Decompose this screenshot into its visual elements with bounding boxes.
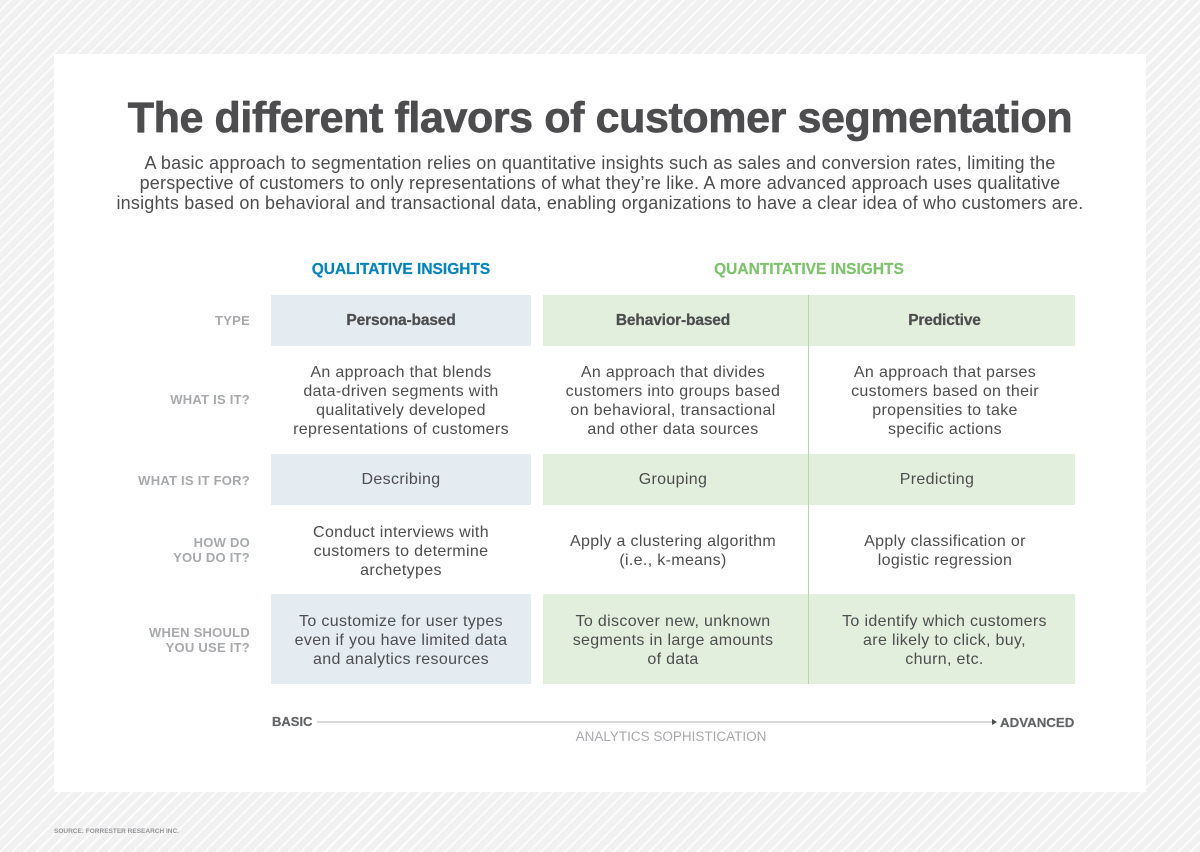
cell: behavior-based use: of data: [647, 651, 699, 668]
intro text: [116, 152, 1084, 213]
cell: behavior-based description: customers into groups based: [566, 383, 780, 400]
intro text: perspective of customers to only representations of what they’re like. A more advanced approach uses qualitative: [140, 172, 1060, 192]
cell: behavior-based method: Apply a clustering algorithm: [570, 533, 776, 550]
label: advanced: ADVANCED: [1000, 714, 1074, 730]
cell: persona-based method: Conduct interviews with: [313, 524, 489, 541]
cell: persona-based description: [293, 364, 509, 438]
title: The different flavors of customer segmentation: [128, 94, 1072, 142]
intro text: A basic approach to segmentation relies on quantitative insights such as sales and conversion rates, limiting the: [144, 152, 1055, 172]
cell: persona-based use: [271, 594, 531, 684]
cell: persona-based method: archetypes: [360, 562, 442, 579]
cell: behavior-based type: Behavior-based: [616, 312, 730, 329]
cell: grouping: [543, 454, 809, 505]
cell: persona-based type: Persona-based: [346, 312, 456, 329]
cell: persona-based use: even if you have limited data: [295, 632, 507, 649]
panel: white card: [54, 54, 1146, 792]
cell: behavior-based description: and other data sources: [587, 421, 759, 438]
heading: quantitative insights: QUANTITATIVE INSIGHTS: [714, 261, 904, 278]
cell: grouping: Grouping: [639, 471, 707, 488]
cell: predicting: Predicting: [900, 471, 974, 488]
cell: describing: [271, 454, 531, 505]
column: behavior-based: [543, 295, 808, 684]
cell: persona-based type: [271, 295, 531, 346]
column: persona-based: [271, 295, 531, 684]
cell: behavior-based type: [543, 295, 809, 346]
label: when should you use it: [149, 625, 250, 655]
cell: predictive use: are likely to click, buy,: [863, 632, 1026, 649]
cell: predictive method: logistic regression: [878, 552, 1012, 569]
arrow: sophistication axis: [317, 719, 997, 725]
cell: predictive use: To identify which customers: [842, 613, 1047, 630]
label: type: TYPE: [215, 313, 250, 328]
cell: behavior-based use: [543, 594, 809, 684]
label: how do you do it: [173, 535, 250, 565]
cell: predictive type: Predictive: [908, 312, 981, 329]
intro text: insights based on behavioral and transactional data, enabling organizations to have a clear idea of who customers are.: [116, 192, 1084, 212]
cell: predictive description: specific actions: [888, 421, 1002, 438]
cell: behavior-based use: To discover new, unknown: [576, 613, 770, 630]
cell: persona-based description: representations of customers: [293, 421, 509, 438]
label: what is it: WHAT IS IT?: [170, 392, 250, 407]
cell: persona-based use: To customize for user types: [299, 613, 503, 630]
cell: persona-based use: and analytics resources: [313, 651, 489, 668]
cell: predictive use: [809, 594, 1075, 684]
column: predictive: [809, 295, 1075, 684]
cell: predictive description: [851, 364, 1039, 438]
cell: predictive type: [809, 295, 1075, 346]
cell: persona-based description: An approach that blends: [310, 364, 492, 381]
cell: predictive method: Apply classification or: [864, 533, 1026, 550]
label: when should you use it: YOU USE IT?: [166, 640, 250, 655]
heading: qualitative insights: QUALITATIVE INSIGHTS: [312, 261, 490, 278]
cell: persona-based description: data-driven segments with: [303, 383, 499, 400]
cell: behavior-based description: An approach that divides: [581, 364, 765, 381]
cell: predictive method: [864, 533, 1026, 569]
cell: predicting: [809, 454, 1075, 505]
cell: behavior-based description: on behavioral, transactional: [570, 402, 776, 419]
cell: predictive description: An approach that parses: [854, 364, 1036, 381]
cell: describing: Describing: [362, 471, 440, 488]
cell: persona-based method: [313, 524, 489, 579]
label: how do you do it: HOW DO: [194, 535, 250, 550]
source note: SOURCE: FORRESTER RESEARCH INC.: [54, 828, 179, 835]
label: analytics sophistication: ANALYTICS SOPHISTICATION: [576, 729, 766, 744]
cell: behavior-based use: segments in large amounts: [573, 632, 773, 649]
label: when should you use it: WHEN SHOULD: [149, 625, 250, 640]
cell: predictive description: propensities to take: [872, 402, 1018, 419]
cell: behavior-based method: (i.e., k-means): [619, 552, 727, 569]
cell: predictive use: churn, etc.: [905, 651, 984, 668]
cell: persona-based method: customers to determine: [314, 543, 488, 560]
cell: persona-based description: qualitatively developed: [316, 402, 486, 419]
cell: behavior-based description: [566, 364, 780, 438]
cell: predictive description: customers based on their: [851, 383, 1039, 400]
label: how do you do it: YOU DO IT?: [173, 550, 250, 565]
cell: behavior-based method: [570, 533, 776, 569]
row labels: [138, 313, 250, 655]
label: basic: BASIC: [272, 714, 312, 729]
vertical divider: [808, 295, 809, 684]
label: what is it for: WHAT IS IT FOR?: [138, 473, 250, 488]
